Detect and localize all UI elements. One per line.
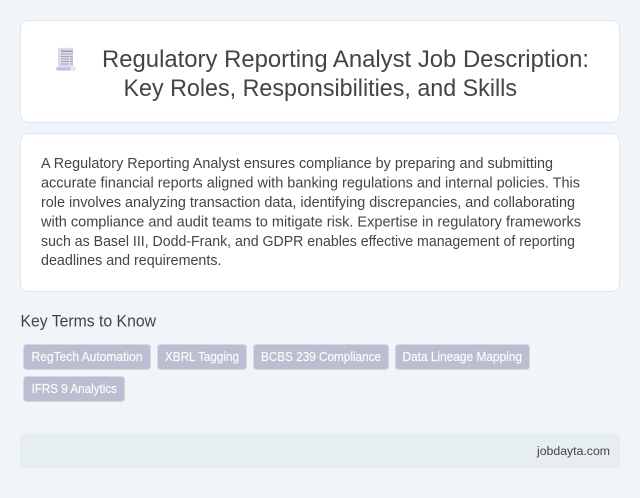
description text: with compliance and audit teams to mitigate risk. Expertise in regulatory frameworks bbox=[40, 214, 581, 230]
description text: accurate financial reports aligned with banking regulations and internal policies. This bbox=[41, 176, 580, 192]
key term tags bbox=[24, 344, 530, 402]
header panel bbox=[20, 20, 620, 122]
footer bar bbox=[20, 434, 620, 468]
icon: regulatory report document bbox=[56, 48, 76, 71]
description text: such as Basel III, Dodd-Frank, and GDPR enables effective management of reporting bbox=[41, 234, 575, 250]
tag: IFRS 9 Analytics: IFRS 9 Analytics bbox=[32, 382, 117, 396]
title: Regulatory Reporting Analyst Job Description: bbox=[102, 46, 589, 73]
tag: BCBS 239 Compliance bbox=[254, 344, 388, 370]
footer source text: jobdayta.com bbox=[536, 444, 610, 458]
description text: role involves analyzing transaction data, identifying discrepancies, and collaborating bbox=[41, 195, 575, 211]
description text: A Regulatory Reporting Analyst ensures compliance by preparing and submitting bbox=[41, 156, 553, 172]
title: Key Roles, Responsibilities, and Skills bbox=[124, 75, 517, 102]
heading: key terms: Key Terms to Know bbox=[20, 312, 156, 330]
tag: RegTech Automation bbox=[24, 344, 150, 370]
title bbox=[102, 46, 589, 102]
description text: deadlines and requirements. bbox=[41, 253, 222, 269]
tag: IFRS 9 Analytics bbox=[24, 376, 124, 402]
tag: XBRL Tagging: XBRL Tagging bbox=[165, 350, 239, 364]
description text bbox=[40, 156, 581, 269]
panel: job description bbox=[20, 134, 620, 292]
tag: BCBS 239 Compliance: BCBS 239 Compliance bbox=[261, 350, 381, 364]
tag: RegTech Automation: RegTech Automation bbox=[32, 350, 143, 364]
tag: Data Lineage Mapping bbox=[396, 344, 530, 370]
tag: Data Lineage Mapping: Data Lineage Mapping bbox=[402, 350, 522, 364]
tag: XBRL Tagging bbox=[158, 344, 246, 370]
